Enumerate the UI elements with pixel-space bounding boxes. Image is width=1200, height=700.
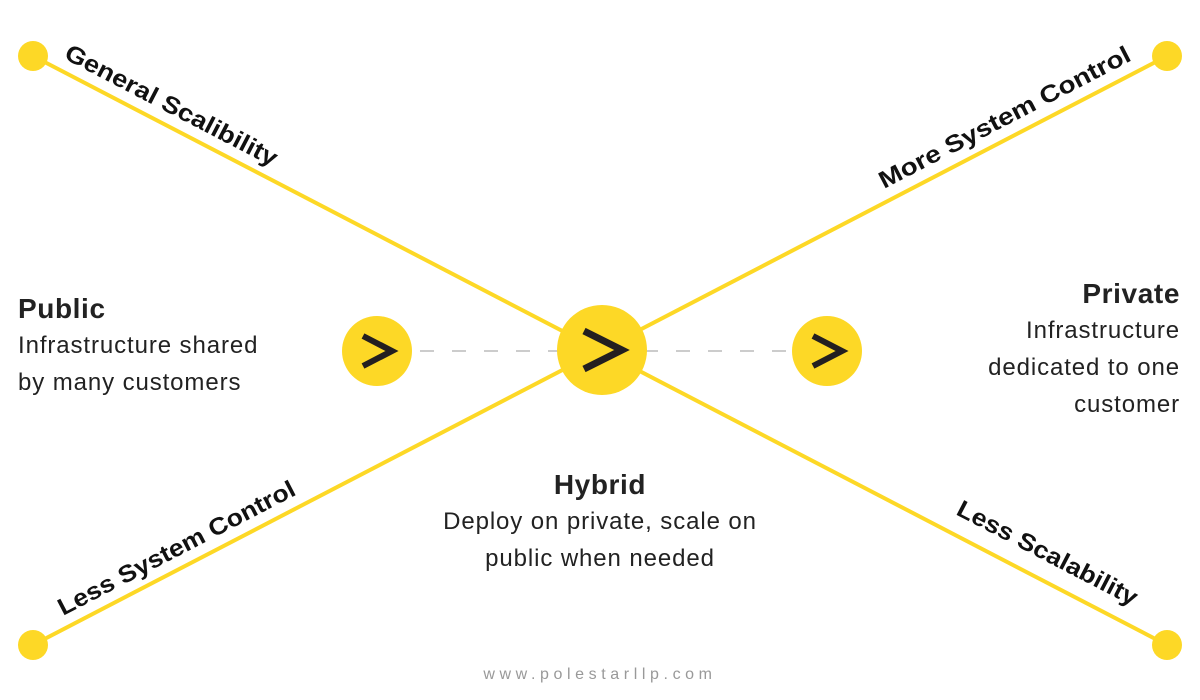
text block: Private <box>988 278 1180 418</box>
footer url: www.polestarllp.com <box>483 666 717 683</box>
dashed connector <box>420 350 790 352</box>
text block: Private: dedicated to one <box>988 354 1180 381</box>
label: Less System Control: Less System Control <box>53 476 300 621</box>
label: General Scalibility: General Scalibility <box>60 39 283 172</box>
text block: Public: Public <box>18 293 106 324</box>
icon: center chevron circle <box>557 305 647 395</box>
text block: Hybrid: Deploy on private, scale on <box>443 508 757 535</box>
text block: Public <box>18 293 258 396</box>
text block: Hybrid: Hybrid <box>554 469 646 500</box>
icon: right chevron circle <box>792 316 862 386</box>
text block: Hybrid: public when needed <box>485 545 715 572</box>
icon: left chevron circle <box>342 316 412 386</box>
text block: Public: by many customers <box>18 369 241 396</box>
label: Less Scalability: Less Scalability <box>952 495 1143 612</box>
text block: Hybrid <box>443 469 757 572</box>
label: More System Control: More System Control <box>874 41 1135 194</box>
text block: Private: Private <box>1082 278 1180 309</box>
text block: Public: Infrastructure shared <box>18 332 258 359</box>
text block: Private: customer <box>1074 391 1180 418</box>
text block: Private: Infrastructure <box>1026 317 1180 344</box>
